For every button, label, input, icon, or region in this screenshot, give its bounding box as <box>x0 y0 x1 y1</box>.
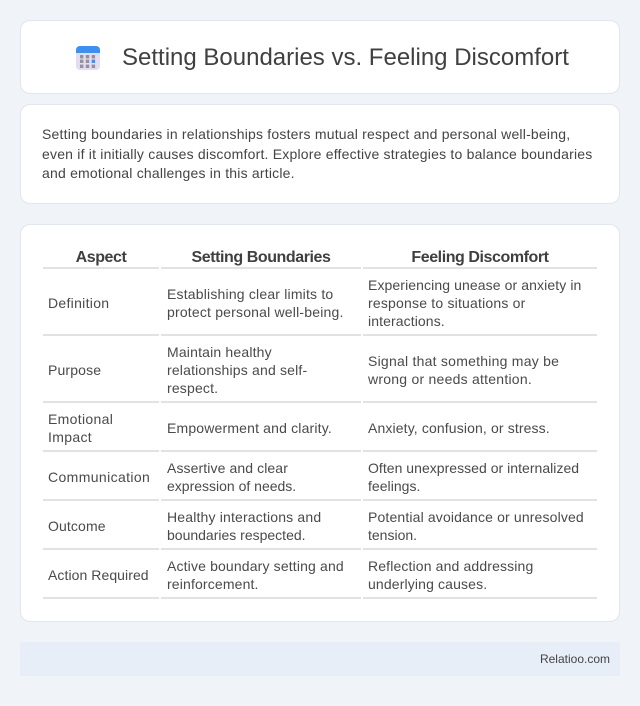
row: Definition, Setting Boundaries <box>167 286 344 320</box>
heading: Aspect: Aspect <box>76 249 126 266</box>
title panel <box>20 20 620 94</box>
row: Purpose, Setting Boundaries: relationships and self- <box>167 362 307 378</box>
row: Purpose, Feeling Discomfort: wrong or needs attention. <box>368 371 532 387</box>
row: Action Required, Feeling Discomfort: Reflection and addressing <box>368 558 533 574</box>
row: Purpose, Setting Boundaries <box>167 344 307 396</box>
row: Emotional Impact label: Emotional <box>48 411 113 427</box>
row: Definition, Feeling Discomfort: response to situations or <box>368 295 526 311</box>
row: Action Required, Setting Boundaries: reinforcement. <box>167 576 259 592</box>
row: Communication, Feeling Discomfort <box>368 460 579 494</box>
row: Emotional Impact, Feeling Discomfort: Anxiety, confusion, or stress. <box>368 420 550 436</box>
row: Emotional Impact label: Impact <box>48 429 92 445</box>
row: Communication, Setting Boundaries <box>167 460 296 494</box>
row: Emotional Impact, Setting Boundaries: Empowerment and clarity. <box>167 420 332 436</box>
row: Definition, Feeling Discomfort <box>368 277 581 329</box>
row: Emotional Impact label <box>48 411 113 445</box>
row: Outcome, Feeling Discomfort: tension. <box>368 527 417 543</box>
row: Definition label: Definition <box>48 295 109 311</box>
panel: comparison table <box>20 224 620 622</box>
footer text: Relatioo.com <box>540 652 610 666</box>
heading: Setting Boundaries: Setting Boundaries <box>192 249 330 266</box>
row: Action Required, Setting Boundaries <box>167 558 344 592</box>
intro text: even if it initially causes discomfort. Explore effective strategies to balance boundaries <box>42 146 592 162</box>
row: Communication label: Communication <box>48 469 150 485</box>
row: Outcome, Setting Boundaries <box>167 509 321 543</box>
row: Definition, Feeling Discomfort: interactions. <box>368 313 445 329</box>
row: Action Required, Setting Boundaries: Active boundary setting and <box>167 558 344 574</box>
row: Purpose label: Purpose <box>48 362 101 378</box>
row: Outcome label: Outcome <box>48 518 106 534</box>
row: Definition, Setting Boundaries: protect personal well-being. <box>167 304 344 320</box>
intro text: Setting boundaries in relationships fosters mutual respect and personal well-being, <box>42 126 570 142</box>
intro panel <box>20 104 620 204</box>
row: Action Required label: Action Required <box>48 567 149 583</box>
heading: Feeling Discomfort: Feeling Discomfort <box>411 249 549 266</box>
row: Communication, Feeling Discomfort: feelings. <box>368 478 420 494</box>
row: Outcome, Feeling Discomfort <box>368 509 584 543</box>
icon: calendar <box>76 46 100 70</box>
row: Definition, Feeling Discomfort: Experiencing unease or anxiety in <box>368 277 581 293</box>
row: Communication, Setting Boundaries: expression of needs. <box>167 478 296 494</box>
row: Purpose, Feeling Discomfort: Signal that something may be <box>368 353 559 369</box>
row: Outcome, Feeling Discomfort: Potential avoidance or unresolved <box>368 509 584 525</box>
intro text <box>42 126 592 181</box>
row: Communication, Setting Boundaries: Assertive and clear <box>167 460 288 476</box>
row: Purpose, Setting Boundaries: Maintain healthy <box>167 344 272 360</box>
row: Definition, Setting Boundaries: Establishing clear limits to <box>167 286 333 302</box>
title: Setting Boundaries vs. Feeling Discomfort <box>122 44 569 71</box>
row: Outcome, Setting Boundaries: Healthy interactions and <box>167 509 321 525</box>
row: Outcome, Setting Boundaries: boundaries respected. <box>167 527 306 543</box>
footer bar <box>20 642 620 676</box>
row: Action Required, Feeling Discomfort: underlying causes. <box>368 576 487 592</box>
intro text: and emotional challenges in this article. <box>42 165 295 181</box>
row: Action Required, Feeling Discomfort <box>368 558 533 592</box>
row: Purpose, Feeling Discomfort <box>368 353 559 387</box>
row: Purpose, Setting Boundaries: respect. <box>167 380 218 396</box>
row: Communication, Feeling Discomfort: Often unexpressed or internalized <box>368 460 579 476</box>
